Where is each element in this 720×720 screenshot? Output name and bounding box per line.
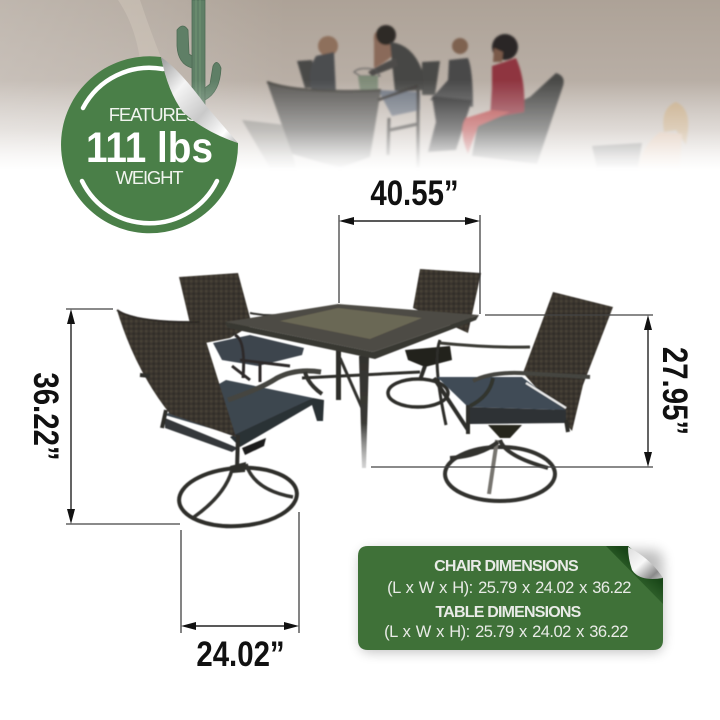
rear right chair — [388, 269, 481, 425]
weight sticker badge — [61, 56, 238, 233]
label text: (L x W x H): 25.79 x 24.02 x 36.22 — [387, 579, 631, 597]
dimension: chair width 24.02 — [181, 512, 299, 674]
label text: TABLE DIMENSIONS — [435, 604, 582, 621]
badge text — [86, 104, 213, 188]
dimension: chair depth 27.95 — [371, 315, 694, 467]
label body — [358, 546, 663, 650]
lifestyle background photo — [0, 0, 720, 170]
table top — [225, 304, 479, 359]
dimension: chair height 36.22 — [26, 309, 180, 524]
diners and patio furniture — [242, 25, 688, 168]
table legs — [302, 350, 420, 468]
dimension: chair height 36.22: 36.22” — [26, 372, 65, 461]
dimensions label sticker — [358, 546, 663, 652]
dimension: chair depth 27.95: 27.95” — [655, 347, 694, 435]
furniture set photo — [117, 269, 613, 530]
label text: (L x W x H): 25.79 x 24.02 x 36.22 — [384, 623, 628, 641]
cactus — [177, 0, 221, 108]
dimension: chair width 24.02: 24.02” — [196, 635, 285, 674]
peel shading — [606, 546, 663, 604]
label shadow — [360, 550, 663, 652]
front left chair — [117, 310, 324, 530]
badge text: WEIGHT — [116, 167, 183, 188]
label text: CHAIR DIMENSIONS — [434, 558, 579, 575]
badge text: FEATURES — [109, 104, 198, 125]
badge disc — [61, 56, 238, 233]
dimension: table width 40.55: 40.55” — [370, 174, 459, 213]
peeled corner — [628, 547, 663, 579]
dimension: table width 40.55 — [339, 174, 480, 314]
badge text: 111 lbs — [86, 123, 213, 171]
rear left chair — [179, 273, 304, 382]
peeled corner — [161, 57, 238, 143]
front right chair — [434, 292, 613, 501]
label text — [384, 558, 631, 641]
badge ring arcs — [82, 68, 217, 223]
